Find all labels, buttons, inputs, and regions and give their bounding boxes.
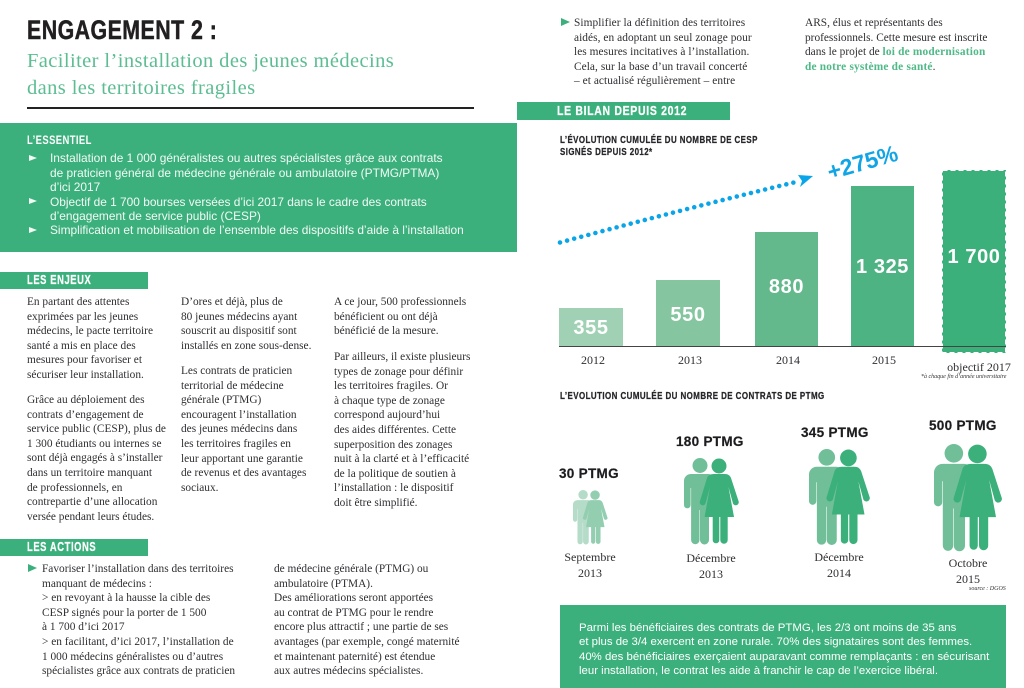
top right column 1: – et actualisé régulièrement – entre (574, 75, 735, 87)
enjeux column 1 paragraph 2: Grâce au déploiement des (27, 394, 144, 406)
label 2012: 2012 (581, 353, 605, 367)
figure: december 2014 (809, 449, 870, 545)
enjeux column 2 paragraph 2: territorial de médecine (181, 380, 284, 392)
enjeux column 3 paragraph 2: l’installation : le dispositif (334, 482, 453, 494)
enjeux column 1 paragraph 2: contrats d’engagement de (27, 409, 144, 421)
top right column 1: les mesures incitatives à l’installation. (574, 46, 749, 58)
enjeux column 1 paragraph 2: dans un territoire manquant (27, 467, 152, 479)
actions column 1: Favoriser l’installation dans des territoires (42, 563, 234, 575)
summary text (579, 622, 990, 677)
subtitle: Faciliter l’installation des jeunes médecins (27, 50, 394, 72)
top right column 2: ARS, élus et représentants des (805, 17, 943, 29)
panel: bilan summary (560, 605, 1006, 688)
enjeux column 1 (27, 296, 153, 381)
date: octobre 2015: 2015 (956, 572, 980, 586)
dotted arrow (560, 175, 813, 242)
summary text: et plus de 3/4 exercent en zone rurale. 70% des signataires sont des femmes. (579, 636, 972, 648)
actions column 1: CESP signés pour la porter de 1 500 (42, 607, 206, 619)
actions column 1: spécialistes grâce aux contrats de praticien (42, 665, 235, 677)
actions column 2: aux autres médecins spécialistes. (274, 665, 423, 677)
enjeux column 1 paragraph 2: de professionnels, en (27, 482, 122, 494)
label: 30 PTMG: 30 PTMG (559, 466, 619, 480)
bullet 1: d’ici 2017 (50, 180, 100, 194)
enjeux column 3 paragraph 2: à chaque type de zonage (334, 395, 445, 407)
actions column 1: 1 000 médecins généralistes ou d’autres (42, 651, 223, 663)
icon: bullet arrow (561, 18, 570, 26)
icon: bullet arrow (28, 564, 37, 572)
bar 2014: 880 (769, 276, 804, 298)
section heading: les actions: LES ACTIONS (27, 540, 96, 554)
bar objectif 2017: 1 700 (947, 246, 1001, 268)
bar 2014 (755, 232, 818, 347)
section heading: les enjeux: LES ENJEUX (27, 273, 91, 287)
enjeux column 3 paragraph 2: doit être simplifié. (334, 497, 417, 509)
enjeux column 3 paragraph 2: Par ailleurs, il existe plusieurs (334, 351, 470, 363)
bullet 3: Simplification et mobilisation de l’ensemble des dispositifs d’aide à l’installation (50, 223, 464, 237)
enjeux column 3 paragraph 2: des aides différentes. Cette (334, 424, 456, 436)
date: octobre 2015: Octobre (949, 556, 987, 570)
section heading: les actions (0, 539, 148, 556)
section heading: les enjeux (0, 272, 148, 289)
enjeux column 2 paragraph 2: encouragent l’installation (181, 409, 297, 421)
enjeux column 2 paragraph 2: Les contrats de praticien (181, 365, 292, 377)
enjeux column 2: souscrit au dispositif sont (181, 325, 297, 337)
bar 2015: 1 325 (856, 256, 909, 278)
actions column 2: et maintenant paternité) est étendue (274, 651, 435, 663)
bar 2015 (851, 186, 914, 347)
enjeux column 2 paragraph 2: sociaux. (181, 482, 218, 494)
enjeux column 3 paragraph 2 (334, 351, 470, 509)
enjeux column 2 (181, 296, 311, 352)
actions column 1 (42, 563, 235, 677)
top right column 1: aidés, en adoptant un seul zonage pour (574, 32, 752, 44)
top right column 2: dans le projet de loi de modernisation (805, 46, 985, 58)
actions column 1: à 1 700 d’ici 2017 (42, 621, 125, 633)
bar 2012: 355 (573, 316, 609, 338)
enjeux column 3 paragraph 2: nuit à la clarté et à l’efficacité (334, 453, 469, 465)
top right column 1: Simplifier la définition des territoires (574, 17, 745, 29)
enjeux column 1: exprimées par les jeunes (27, 311, 138, 323)
figure: december 2013 (684, 458, 739, 544)
actions column 2 (274, 563, 460, 677)
source: source : DGOS (969, 586, 1006, 592)
date: septembre 2013 (564, 550, 616, 580)
enjeux column 1: En partant des attentes (27, 296, 129, 308)
top right column 2: professionnels. Cette mesure est inscrite (805, 32, 987, 44)
actions column 1: > en revoyant à la hausse la cible des (42, 592, 210, 604)
date: septembre 2013: Septembre (564, 550, 616, 564)
enjeux column 3 (334, 296, 466, 337)
date: décembre 2013: 2013 (699, 566, 723, 580)
top right column 2: de notre système de santé. (805, 61, 936, 73)
enjeux column 1: sécuriser leur installation. (27, 369, 144, 381)
chart title: CESP: L’ÉVOLUTION CUMULÉE DU NOMBRE DE CESP (560, 135, 758, 146)
enjeux column 2 paragraph 2: de revenus et des avantages (181, 467, 306, 479)
percent label: +275% (824, 140, 901, 185)
chart title: PTMG: L’EVOLUTION CUMULÉE DU NOMBRE DE CONTRATS DE PTMG (560, 391, 825, 402)
summary text: leur installation, le contrat les aide à franchir le cap de l’exercice libéral. (579, 665, 938, 677)
footnote: *à chaque fin d’année universitaire (921, 374, 1006, 380)
enjeux column 1 paragraph 2 (27, 394, 166, 523)
actions column 2: ambulatoire (PTMA). (274, 578, 373, 590)
bullet 1: Installation de 1 000 généralistes ou autres spécialistes grâce aux contrats (50, 151, 443, 165)
date: décembre 2014: 2014 (827, 566, 851, 580)
enjeux column 3 paragraph 2: de la politique de soutien à (334, 468, 456, 480)
subtitle (27, 50, 394, 99)
top right column 2 (805, 17, 987, 73)
section heading: le bilan: LE BILAN DEPUIS 2012 (557, 104, 687, 118)
label objectif 2017: objectif 2017 (947, 360, 1011, 374)
actions column 2: de médecine générale (PTMG) ou (274, 563, 428, 575)
actions column 1: > en facilitant, d’ici 2017, l’installation de (42, 636, 234, 648)
enjeux column 1 paragraph 2: versée pendant leurs études. (27, 511, 154, 523)
date: décembre 2013 (686, 551, 736, 580)
label 2015: 2015 (872, 353, 896, 367)
date: septembre 2013: 2013 (578, 566, 602, 580)
top right column 1 (574, 17, 752, 87)
enjeux column 1: médecins, le pacte territoire (27, 325, 153, 337)
heading rule (27, 107, 474, 109)
label 2014: 2014 (776, 353, 800, 367)
enjeux column 2 paragraph 2: les territoires fragiles en (181, 438, 291, 450)
panel: l'essentiel (0, 123, 517, 252)
enjeux column 1 paragraph 2: service public (CESP), plus de (27, 423, 166, 435)
enjeux column 1 paragraph 2: 1 300 étudiants ou internes se (27, 438, 162, 450)
enjeux column 1 paragraph 2: contrepartie d’une allocation (27, 496, 157, 508)
section heading: le bilan (517, 102, 730, 120)
bullet 2: d’engagement de service public (CESP) (50, 209, 261, 223)
label: 180 PTMG: 180 PTMG (676, 434, 744, 449)
chart title: CESP: SIGNÉS DEPUIS 2012* (560, 147, 653, 158)
bar 2013 (656, 280, 720, 347)
enjeux column 3: bénéficié de la mesure. (334, 325, 439, 337)
enjeux column 2 paragraph 2: générale (PTMG) (181, 394, 261, 406)
label: 345 PTMG: 345 PTMG (801, 425, 869, 440)
enjeux column 2: D’ores et déjà, plus de (181, 296, 283, 308)
date: décembre 2014: Décembre (814, 550, 864, 564)
bullet 2: Objectif de 1 700 bourses versées d’ici 2017 dans le cadre des contrats (50, 194, 427, 208)
enjeux column 2 paragraph 2: des jeunes médecins dans (181, 423, 297, 435)
figure: september 2013 (573, 490, 608, 544)
label 2013: 2013 (678, 353, 702, 367)
enjeux column 3: A ce jour, 500 professionnels (334, 296, 466, 308)
enjeux column 2: 80 jeunes médecins ayant (181, 311, 297, 323)
date: décembre 2013: Décembre (686, 551, 736, 565)
enjeux column 1: mesures pour favoriser et (27, 354, 142, 366)
enjeux column 1 paragraph 2: sont déjà engagés à s’installer (27, 452, 162, 464)
enjeux column 3 paragraph 2: types de zonage pour définir (334, 366, 463, 378)
label: 500 PTMG: 500 PTMG (929, 418, 997, 433)
enjeux column 3 paragraph 2: les territoires fragiles. Or (334, 380, 448, 392)
enjeux column 3 paragraph 2: superposition des zonages (334, 439, 452, 451)
bullet 2 (29, 194, 427, 223)
bullet 1: de praticien général de médecine générale ou ambulatoire (PTMG/PTMA) (50, 166, 439, 180)
enjeux column 3: bénéficient ou ont déjà (334, 311, 438, 323)
bar 2012 (559, 308, 623, 347)
date: décembre 2014 (814, 550, 864, 580)
title: ENGAGEMENT 2 : (27, 15, 217, 45)
enjeux column 2 paragraph 2: leur apportant une garantie (181, 453, 303, 465)
enjeux column 3 paragraph 2: correspond aujourd’hui (334, 409, 440, 421)
figure: october 2015 (934, 444, 1002, 551)
actions column 1: manquant de médecins : (42, 578, 152, 590)
actions column 2: encore plus attractif ; une partie de ses (274, 621, 448, 633)
summary text: 40% des bénéficiaires exerçaient auparavant comme remplaçants : en sécurisant (579, 651, 989, 663)
top right column 1: Cela, sur la base d’un travail concerté (574, 61, 747, 73)
bar 2013: 550 (670, 304, 706, 326)
enjeux column 1: santé a mis en place des (27, 340, 136, 352)
summary text: Parmi les bénéficiaires des contrats de PTMG, les 2/3 ont moins de 35 ans (579, 622, 956, 634)
bar objectif 2017 (942, 170, 1006, 353)
date: octobre 2015 (949, 556, 987, 586)
essentiel heading: L’ESSENTIEL (27, 135, 92, 147)
actions column 2: Des améliorations seront apportées (274, 592, 433, 604)
actions column 2: au contrat de PTMG pour le rendre (274, 607, 433, 619)
enjeux column 2 paragraph 2 (181, 365, 306, 494)
enjeux column 2: installés en zone sous-dense. (181, 340, 311, 352)
actions column 2: avantages (par exemple, congé maternité (274, 636, 460, 648)
axis (559, 346, 1006, 347)
chart title: CESP (560, 134, 758, 158)
bullet 1 (29, 151, 443, 194)
essentiel list (29, 151, 464, 237)
subtitle: dans les territoires fragiles (27, 77, 255, 99)
